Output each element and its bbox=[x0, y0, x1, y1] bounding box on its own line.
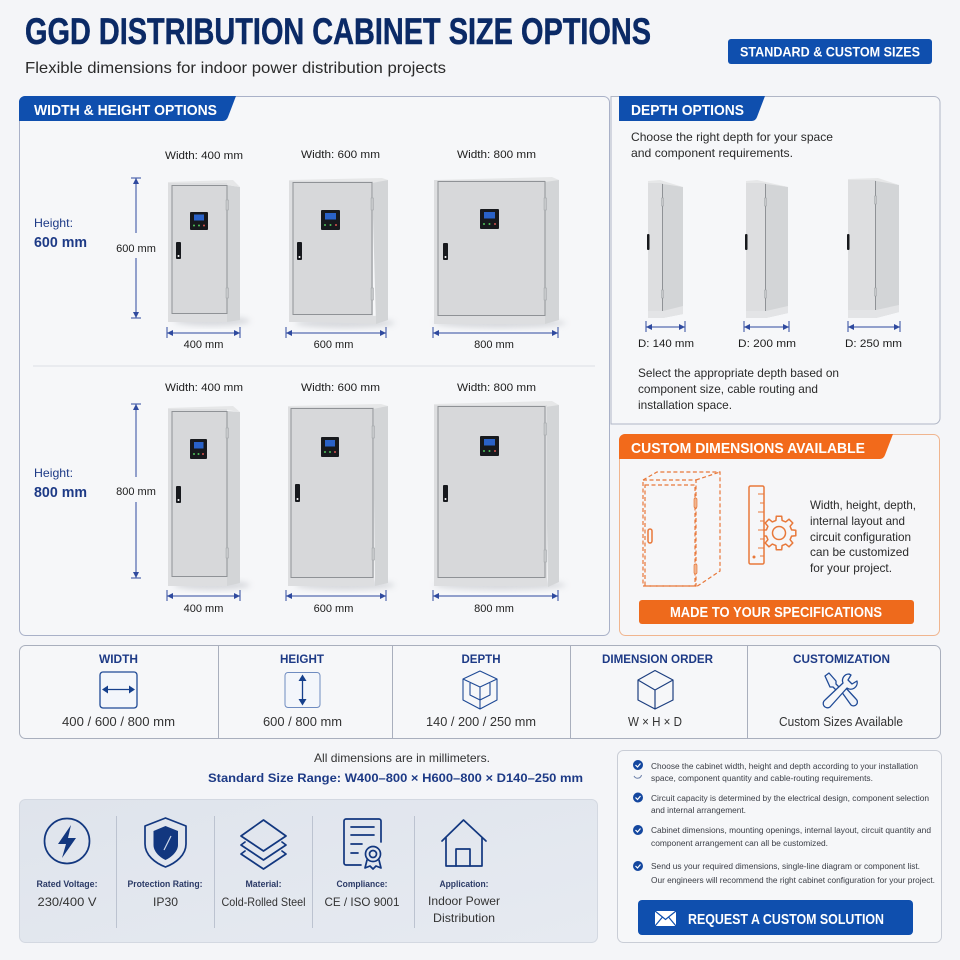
dimension arrow: width 400 bbox=[167, 327, 240, 351]
column: width: WIDTH bbox=[99, 652, 138, 666]
custom dimensions description: internal layout and bbox=[810, 514, 905, 528]
dimension arrow: height 800 mm bbox=[116, 404, 156, 578]
depth dimension: 200 mm: D: 200 mm bbox=[738, 338, 796, 350]
panel: selection notes bbox=[618, 750, 942, 942]
depth dimension: 140 mm bbox=[638, 321, 694, 350]
column: dimension order bbox=[602, 652, 713, 729]
spec: protection rating bbox=[128, 818, 203, 909]
button: made to your specifications: MADE TO YOUR SPECIFICATIONS bbox=[670, 605, 882, 621]
custom dimensions description: circuit configuration bbox=[810, 530, 911, 544]
column: dimension order: W × H × D bbox=[628, 715, 682, 729]
note 1: Choose the cabinet width, height and depth according to your installation bbox=[651, 761, 918, 771]
panel: custom dimensions available bbox=[619, 434, 940, 636]
dimension arrow: row 2, width 400 bbox=[167, 590, 240, 615]
panel heading: depth options: DEPTH OPTIONS bbox=[631, 102, 744, 119]
note 1: space, component quantity and cable-routing requirements. bbox=[651, 773, 873, 783]
spec: rated voltage bbox=[36, 818, 98, 909]
depth cabinet: 200 mm bbox=[745, 180, 788, 318]
cabinet: 800 by 600 bbox=[434, 177, 566, 328]
dimension arrow: width 800: 800 mm bbox=[474, 339, 514, 351]
depth intro text: Choose the right depth for your space bbox=[631, 130, 833, 144]
button: request a custom solution bbox=[638, 900, 913, 935]
note 3: Cabinet dimensions, mounting openings, internal layout, circuit quantity and bbox=[651, 825, 931, 835]
icon: envelope bbox=[655, 911, 676, 926]
dimension arrow: height 600 mm: 600 mm bbox=[116, 243, 156, 255]
dimension arrow: row 2, width 600: 600 mm bbox=[314, 603, 353, 615]
row label: height 600 mm: 600 mm bbox=[34, 234, 87, 251]
column: customization: Custom Sizes Available bbox=[779, 715, 903, 729]
spec: material: Cold-Rolled Steel bbox=[222, 895, 306, 909]
depth guidance text: component size, cable routing and bbox=[638, 382, 818, 396]
panel heading: width and height options: WIDTH & HEIGHT OPTIONS bbox=[34, 102, 217, 119]
spec: material bbox=[222, 820, 306, 909]
depth guidance text bbox=[638, 366, 839, 412]
spec: rated voltage: Rated Voltage: bbox=[36, 879, 98, 889]
depth intro text: and component requirements. bbox=[631, 146, 793, 160]
width label: row 2, 800 mm: Width: 800 mm bbox=[457, 382, 536, 394]
dimension arrow: width 800 bbox=[433, 327, 558, 351]
panel heading: custom dimensions bbox=[619, 434, 893, 459]
spec: protection rating: IP30 bbox=[153, 895, 178, 909]
icon: dashed cabinet outline bbox=[643, 472, 720, 587]
badge: standard and custom sizes: STANDARD & CUSTOM SIZES bbox=[740, 44, 920, 60]
note 4: Send us your required dimensions, single-line diagram or component list. bbox=[651, 861, 920, 871]
depth intro text bbox=[631, 130, 833, 160]
width label: 600 mm: Width: 600 mm bbox=[301, 149, 380, 161]
width label: row 2, 600 mm: Width: 600 mm bbox=[301, 382, 380, 394]
standard size range: Standard Size Range: W400–800 × H600–800 × D140–250 mm bbox=[208, 771, 583, 785]
column: depth bbox=[426, 652, 536, 729]
spec: application bbox=[428, 820, 500, 925]
panel heading: custom dimensions: CUSTOM DIMENSIONS AVAILABLE bbox=[631, 440, 865, 457]
title: GGD DISTRIBUTION CABINET SIZE OPTIONS bbox=[25, 11, 651, 52]
width label: 800 mm: Width: 800 mm bbox=[457, 149, 536, 161]
note 3: component arrangement can all be customized. bbox=[651, 838, 828, 848]
depth dimension: 250 mm bbox=[845, 321, 902, 350]
column: width: 400 / 600 / 800 mm bbox=[62, 715, 175, 729]
dimension arrow: width 400: 400 mm bbox=[184, 339, 223, 351]
note 2 bbox=[633, 792, 929, 815]
depth dimension: 250 mm: D: 250 mm bbox=[845, 338, 902, 350]
cabinet: 800 by 800 bbox=[434, 401, 566, 590]
depth dimension: 200 mm bbox=[738, 321, 796, 350]
dimension arrow: row 2, width 800: 800 mm bbox=[474, 603, 514, 615]
badge: standard and custom sizes bbox=[728, 39, 932, 64]
spec: rated voltage: 230/400 V bbox=[38, 895, 96, 909]
icon: ruler and gear bbox=[749, 486, 796, 564]
note 2: Circuit capacity is determined by the electrical design, component selection bbox=[651, 793, 929, 803]
panel: width and height options bbox=[19, 96, 610, 636]
column: customization bbox=[779, 652, 903, 729]
custom dimensions description bbox=[810, 498, 916, 575]
dimension arrow: row 2, width 800 bbox=[433, 590, 558, 615]
note 2: and internal arrangement. bbox=[651, 805, 746, 815]
units note: All dimensions are in millimeters. bbox=[314, 751, 490, 765]
panel heading: depth options bbox=[619, 96, 765, 121]
subtitle: Flexible dimensions for indoor power distribution projects bbox=[25, 60, 446, 77]
width label: row 2, 400 mm: Width: 400 mm bbox=[165, 382, 243, 394]
row label: height 800 mm bbox=[34, 466, 87, 501]
custom dimensions description: for your project. bbox=[810, 561, 892, 575]
custom dimensions description: Width, height, depth, bbox=[810, 498, 916, 512]
column: dimension order: DIMENSION ORDER bbox=[602, 652, 713, 666]
spec: compliance: Compliance: bbox=[336, 879, 388, 889]
spec: compliance: CE / ISO 9001 bbox=[324, 895, 400, 909]
summary table of dimensions bbox=[20, 646, 940, 739]
column: height: 600 / 800 mm bbox=[263, 715, 342, 729]
row label: height 600 mm: Height: bbox=[34, 216, 73, 230]
button: made to your specifications bbox=[639, 600, 914, 624]
column: height bbox=[263, 652, 342, 729]
depth cabinet: 250 mm bbox=[847, 178, 899, 318]
note 4 bbox=[633, 861, 935, 885]
dimension arrow: height 600 mm bbox=[116, 178, 156, 318]
spec: application: Indoor Power bbox=[428, 894, 500, 908]
dimension arrow: row 2, width 600 bbox=[286, 590, 386, 615]
spec: material: Material: bbox=[246, 879, 282, 889]
cabinet: 400 by 600 bbox=[168, 180, 250, 326]
spec: compliance bbox=[324, 819, 400, 909]
row label: height 800 mm: Height: bbox=[34, 466, 73, 480]
row label: height 600 mm bbox=[34, 216, 87, 251]
depth dimension: 140 mm: D: 140 mm bbox=[638, 338, 694, 350]
dimension arrow: height 800 mm: 800 mm bbox=[116, 486, 156, 498]
note 1 bbox=[633, 760, 918, 783]
width label: 400 mm: Width: 400 mm bbox=[165, 150, 243, 162]
spec: application: Distribution bbox=[433, 911, 495, 925]
column: width bbox=[62, 652, 175, 729]
cabinet: 600 by 800 bbox=[288, 404, 395, 590]
dimension arrow: row 2, width 400: 400 mm bbox=[184, 603, 223, 615]
panel heading: width and height options bbox=[19, 96, 236, 121]
column: customization: CUSTOMIZATION bbox=[793, 652, 890, 666]
depth guidance text: Select the appropriate depth based on bbox=[638, 366, 839, 380]
depth cabinet: 140 mm bbox=[647, 180, 683, 318]
column: depth: DEPTH bbox=[462, 652, 500, 666]
button: request a custom solution: REQUEST A CUSTOM SOLUTION bbox=[688, 911, 884, 928]
dimension arrow: width 600 bbox=[286, 327, 386, 351]
panel: product specifications bbox=[20, 800, 598, 942]
cabinet: 600 by 600 bbox=[289, 178, 395, 328]
dimension arrow: width 600: 600 mm bbox=[314, 339, 353, 351]
note 3 bbox=[633, 825, 931, 848]
row label: height 800 mm: 800 mm bbox=[34, 484, 87, 501]
cabinet: 400 by 800 bbox=[168, 406, 250, 590]
column: depth: 140 / 200 / 250 mm bbox=[426, 715, 536, 729]
spec: application: Application: bbox=[440, 879, 488, 889]
custom dimensions description: can be customized bbox=[810, 545, 909, 559]
panel: depth options bbox=[611, 96, 940, 424]
spec: protection rating: Protection Rating: bbox=[128, 879, 203, 889]
note 4: Our engineers will recommend the right cabinet configuration for your project. bbox=[651, 875, 935, 885]
depth guidance text: installation space. bbox=[638, 398, 732, 412]
column: height: HEIGHT bbox=[280, 652, 325, 666]
